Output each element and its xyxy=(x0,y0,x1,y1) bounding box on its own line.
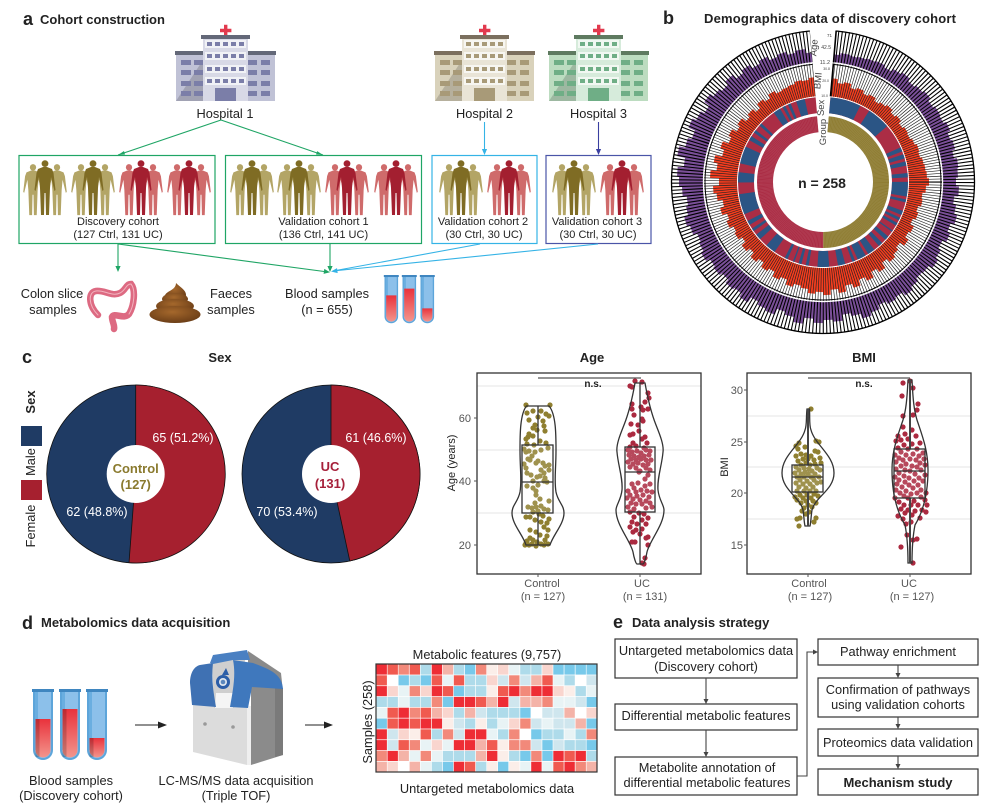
heatmap title: Metabolic features (9,757) xyxy=(413,647,561,662)
icon: hospital 1 xyxy=(175,25,276,101)
cohort box: validation 2 xyxy=(432,156,537,244)
panel b heading: b xyxy=(663,8,674,28)
flow box: untargeted data: (Discovery cohort) xyxy=(654,659,758,674)
BMI axes frame and labels: Control xyxy=(791,578,827,590)
cohort box: discovery: Discovery cohort xyxy=(77,216,159,228)
axis gap with track labels: Sex xyxy=(816,99,827,116)
legend: sex: Male xyxy=(23,448,38,476)
arrow: instrument to heatmap xyxy=(305,722,333,728)
pie: UC: 61 (46.6%) xyxy=(345,431,407,445)
axis gap with track labels: Age xyxy=(808,39,821,57)
flow box: annotation: Metabolite annotation of xyxy=(639,760,776,775)
age axes frame and labels: 40 xyxy=(459,476,471,488)
sample labels: Colon slice xyxy=(21,286,83,301)
sample labels: (n = 655) xyxy=(301,302,353,317)
panel c heading: c xyxy=(22,347,32,367)
arrows: hospitals to cohorts xyxy=(118,120,601,155)
panel c heading: Sex xyxy=(208,350,232,365)
flow arrows xyxy=(704,650,900,776)
pie: control: 62 (48.8%) xyxy=(66,505,128,519)
flow box: differential features xyxy=(615,704,797,730)
heatmap xyxy=(376,664,597,772)
flow box: untargeted data xyxy=(615,639,797,678)
pie: control xyxy=(47,385,225,563)
blood samples caption: Blood samples xyxy=(29,773,113,788)
cohort box: discovery xyxy=(19,156,215,244)
flow box: confirmation: using validation cohorts xyxy=(831,697,965,712)
BMI dots: UC xyxy=(895,381,927,563)
legend: sex xyxy=(21,390,42,547)
panel d heading: Metabolomics data acquisition xyxy=(41,615,230,630)
blood samples caption xyxy=(19,773,123,803)
age axes frame and labels: 60 xyxy=(459,413,471,425)
icon: LC-MS instrument xyxy=(190,650,283,765)
flow box: confirmation: Confirmation of pathways xyxy=(826,682,970,697)
panel d heading: d xyxy=(22,613,33,633)
flow box: annotation: differential metabolic features xyxy=(624,775,790,790)
pie: UC: (131) xyxy=(315,476,345,491)
ring: BMI bars xyxy=(704,63,942,301)
cohort box: discovery: (127 Ctrl, 131 UC) xyxy=(73,229,163,241)
sample labels: samples xyxy=(207,302,255,317)
flow box: pathway enrichment xyxy=(818,639,978,665)
panel c heading xyxy=(22,347,232,367)
pie: control: 65 (51.2%) xyxy=(152,431,214,445)
age axes frame and labels: Control xyxy=(524,578,560,590)
blood samples caption: (Discovery cohort) xyxy=(19,788,123,803)
BMI axes frame and labels: UC xyxy=(901,578,917,590)
BMI axes frame and labels: n.s. xyxy=(855,379,873,390)
age dots: UC xyxy=(627,381,652,564)
axis gap with track labels xyxy=(808,27,836,182)
ring: sex xyxy=(746,105,900,259)
legend: sex: Sex xyxy=(23,390,38,414)
flow box: annotation xyxy=(615,757,797,795)
BMI axes frame and labels: 20 xyxy=(731,488,743,500)
icon: hospital 3 xyxy=(548,25,649,101)
age axes frame and labels: (n = 131) xyxy=(623,591,667,603)
axis gap with track labels: 71 xyxy=(827,33,832,38)
sample labels: samples xyxy=(29,302,77,317)
BMI dots: control xyxy=(795,409,821,526)
axis gap with track labels: Group xyxy=(818,119,829,145)
age violins and boxes xyxy=(512,383,664,564)
pie: UC: UC xyxy=(321,459,340,474)
center label: n = 258 xyxy=(798,175,846,191)
arrows: cohorts to samples xyxy=(115,244,598,274)
BMI axes frame and labels: 15 xyxy=(731,540,743,552)
flow box: mechanism xyxy=(818,769,978,795)
panel e: data analysis strategy xyxy=(613,612,978,795)
age axes frame and labels xyxy=(446,373,701,603)
axis gap with track labels: 20.0 xyxy=(822,79,829,83)
icon: colon xyxy=(90,284,134,329)
BMI axes frame and labels: BMI xyxy=(719,457,731,477)
arrow: tubes to instrument xyxy=(135,722,167,728)
sample labels xyxy=(21,286,369,317)
icon: blood tubes discovery xyxy=(32,689,108,760)
BMI chart title: BMI xyxy=(852,350,876,365)
pie: control: (127) xyxy=(121,477,151,492)
chart: age violin plot xyxy=(446,350,701,603)
axis gap with track labels: 11.2 xyxy=(820,60,830,66)
flow box: proteomics xyxy=(818,729,978,756)
panel e heading: e xyxy=(613,612,623,632)
heatmap caption: Untargeted metabolomics data xyxy=(400,781,575,796)
panel e heading: Data analysis strategy xyxy=(632,615,770,630)
hospital labels xyxy=(197,106,627,121)
legend: sex: Female xyxy=(23,505,38,547)
pie: control: Control xyxy=(113,461,159,476)
flow box: pathway enrichment: Pathway enrichment xyxy=(840,644,956,659)
panel d heading xyxy=(22,613,230,633)
age chart title: Age xyxy=(580,350,604,365)
age dots: control xyxy=(524,405,550,546)
sample labels: Faeces xyxy=(210,286,252,301)
icon: blood tubes xyxy=(384,275,435,323)
BMI axes frame and labels: (n = 127) xyxy=(890,591,934,603)
cohort box: validation 1 xyxy=(226,156,422,244)
sample labels: Blood samples xyxy=(285,286,369,301)
flow box: mechanism: Mechanism study xyxy=(843,775,953,790)
panel a heading: Cohort construction xyxy=(40,12,165,27)
panel c: sex pies xyxy=(21,347,420,563)
panel e heading xyxy=(613,612,770,632)
flow box: untargeted data: Untargeted metabolomics data xyxy=(619,643,794,658)
age axes frame and labels: Age (years) xyxy=(446,435,458,491)
chart: BMI violin plot xyxy=(719,350,971,603)
axis gap with track labels: 30.8 xyxy=(823,67,830,71)
BMI axes frame and labels: 30 xyxy=(731,385,743,397)
hospital labels: Hospital 3 xyxy=(570,106,627,121)
panel d: metabolomics data acquisition xyxy=(19,613,597,803)
panel a: cohort construction xyxy=(19,9,651,329)
age axes frame and labels: 20 xyxy=(459,540,471,552)
BMI axes frame and labels: (n = 127) xyxy=(788,591,832,603)
panel b heading: Demographics data of discovery cohort xyxy=(704,11,957,26)
BMI axes frame and labels: 25 xyxy=(731,437,743,449)
panel a heading xyxy=(23,9,165,29)
ring: age bars xyxy=(672,30,974,334)
panel b: demographics circular plot xyxy=(663,8,974,334)
flow box: differential features: Differential metabolic features xyxy=(621,708,791,723)
age axes frame and labels: (n = 127) xyxy=(521,591,565,603)
BMI violins and boxes xyxy=(782,380,928,563)
icon: faeces xyxy=(150,283,200,323)
panel b heading xyxy=(663,8,957,28)
axis gap with track labels: 10.0 xyxy=(821,94,828,98)
BMI axes frame and labels xyxy=(719,373,971,603)
instrument caption xyxy=(158,773,314,803)
flow box: proteomics: Proteomics data validation xyxy=(823,735,973,750)
flow box: confirmation xyxy=(818,678,978,717)
axis gap with track labels: BMI xyxy=(812,72,825,90)
cohort box: validation 3: Validation cohort 3 xyxy=(552,216,642,228)
cohort box: validation 3 xyxy=(546,156,651,244)
icon: hospital 2 xyxy=(434,25,535,101)
axis gap with track labels: 42.5 xyxy=(821,45,831,51)
cohort box: validation 1: (136 Ctrl, 141 UC) xyxy=(279,229,368,241)
hospital labels: Hospital 1 xyxy=(197,106,253,121)
pie: UC: 70 (53.4%) xyxy=(256,505,318,519)
panel a heading: a xyxy=(23,9,34,29)
hospital labels: Hospital 2 xyxy=(456,106,513,121)
ring: group xyxy=(765,124,881,240)
cohort box: validation 3: (30 Ctrl, 30 UC) xyxy=(559,229,637,241)
cohort box: validation 1: Validation cohort 1 xyxy=(278,216,369,228)
instrument caption: LC-MS/MS data acquisition xyxy=(158,773,314,788)
heatmap y label: Samples (258) xyxy=(360,680,375,764)
instrument caption: (Triple TOF) xyxy=(202,788,270,803)
age axes frame and labels: UC xyxy=(634,578,650,590)
pie: UC xyxy=(242,385,420,563)
cohort box: validation 2: (30 Ctrl, 30 UC) xyxy=(445,229,523,241)
age axes frame and labels: n.s. xyxy=(584,379,602,390)
cohort box: validation 2: Validation cohort 2 xyxy=(438,216,528,228)
